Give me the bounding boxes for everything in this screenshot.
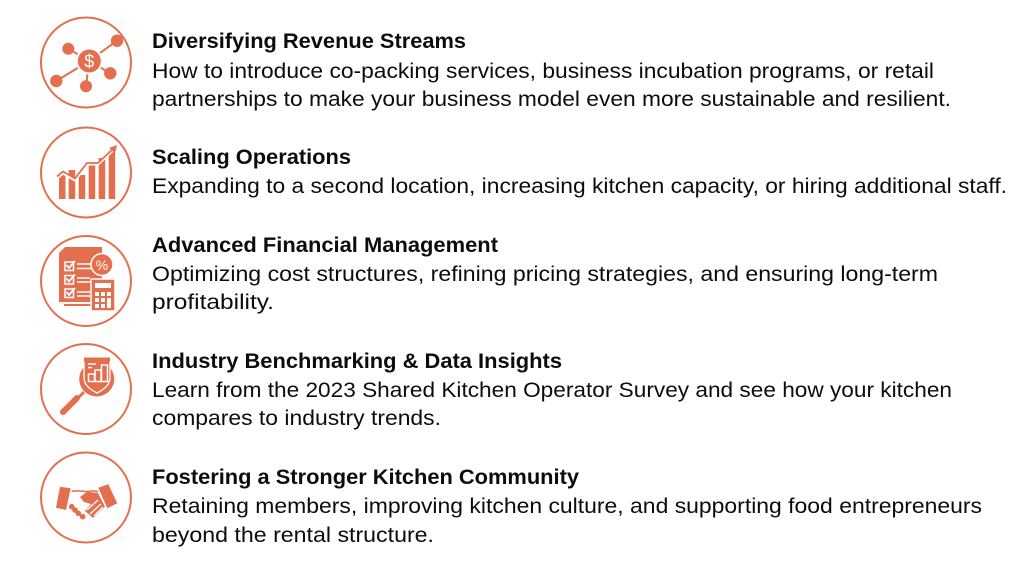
icon: magnifier over report — [41, 344, 131, 434]
heading: Scaling Operations — [152, 145, 351, 169]
row 1: diversifying revenue streams — [41, 18, 951, 111]
icon: growth bar chart — [41, 128, 131, 218]
text block: compares to industry trends. — [152, 406, 441, 430]
text block: profitability. — [152, 290, 274, 314]
text block — [152, 262, 938, 314]
heading: Diversifying Revenue Streams — [152, 29, 466, 53]
text block: How to introduce co-packing services, business incubation programs, or retail — [152, 59, 934, 83]
text block: Learn from the 2023 Shared Kitchen Operator Survey and see how your kitchen — [152, 378, 952, 402]
heading: Fostering a Stronger Kitchen Community — [152, 465, 579, 489]
row 2: scaling operations — [41, 128, 1007, 218]
text block — [152, 378, 952, 430]
icon: financial document and calculator: % — [96, 257, 108, 273]
text block: Optimizing cost structures, refining pricing strategies, and ensuring long-term — [152, 262, 938, 286]
text block: Expanding to a second location, increasing kitchen capacity, or hiring additional staff. — [152, 174, 1007, 198]
heading: Industry Benchmarking & Data Insights — [152, 349, 562, 373]
text block: partnerships to make your business model even more sustainable and resilient. — [152, 87, 951, 111]
icon: handshake — [41, 452, 131, 542]
icon: revenue network: $ — [84, 52, 94, 72]
text block — [152, 59, 951, 111]
icon: financial document and calculator — [41, 236, 131, 326]
row 3: advanced financial management — [41, 233, 938, 326]
row 5: kitchen community — [41, 452, 982, 547]
row 4: industry benchmarking — [41, 344, 952, 434]
text block: beyond the rental structure. — [152, 523, 434, 547]
heading: Advanced Financial Management — [152, 233, 498, 257]
icon: revenue network — [41, 18, 131, 108]
text block — [152, 494, 982, 547]
text block: Retaining members, improving kitchen culture, and supporting food entrepreneurs — [152, 494, 982, 518]
